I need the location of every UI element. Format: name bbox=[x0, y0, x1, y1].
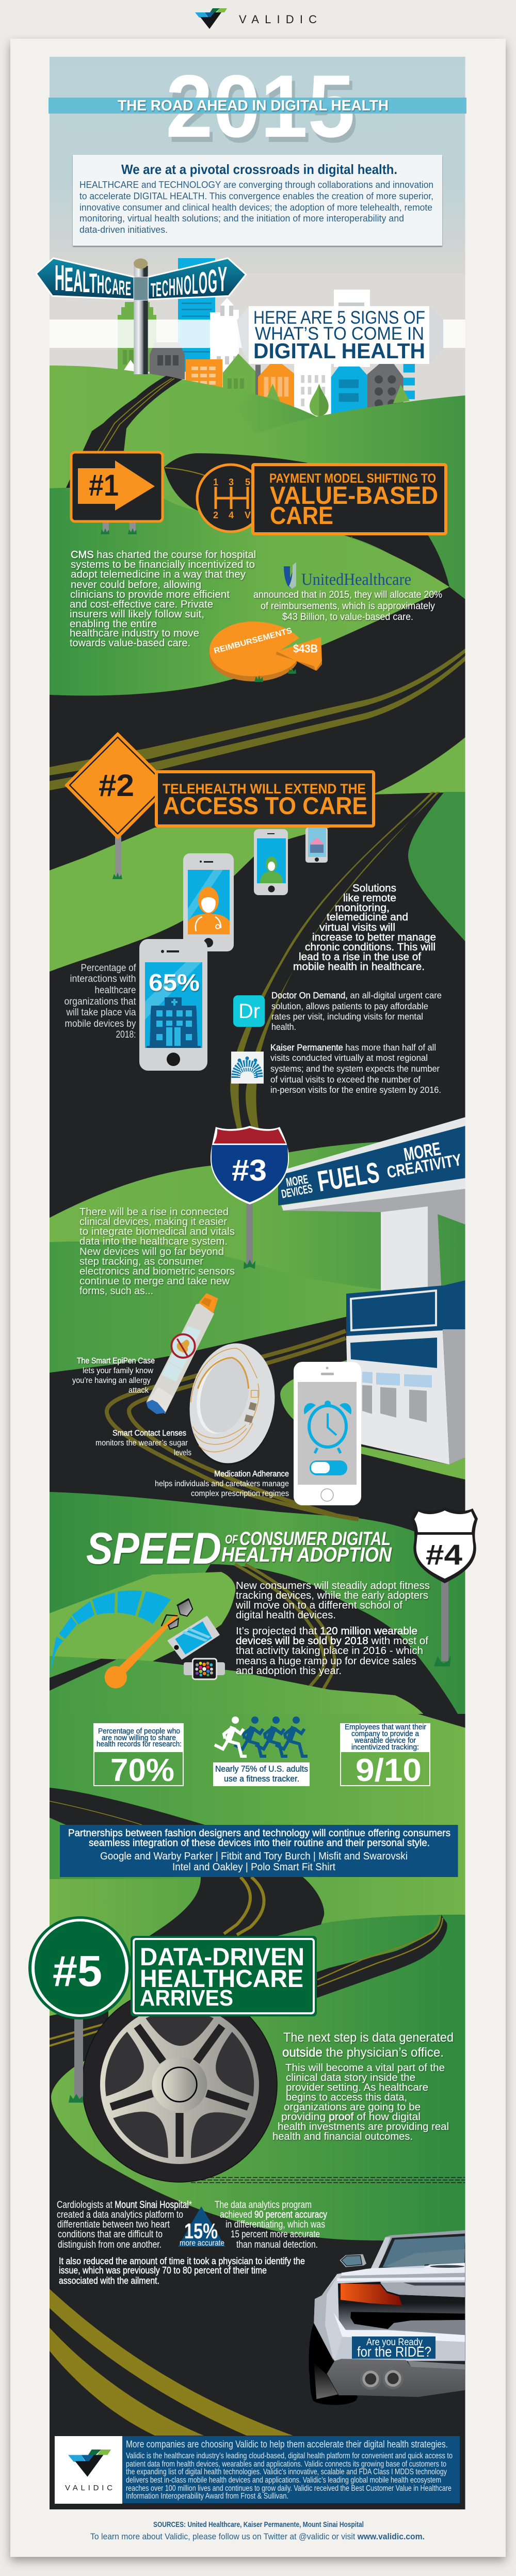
text: percentage of interactions: mobile devices by bbox=[65, 1019, 136, 1029]
stat box: 70%: health records for research: bbox=[96, 1740, 182, 1748]
speedometer hill bbox=[50, 1572, 235, 1661]
stat box: 70%: Percentage of people who bbox=[98, 1727, 180, 1736]
heading: speed of consumer digital health adoption: OF bbox=[225, 1533, 238, 1547]
text: next step: health and financial outcomes. bbox=[272, 2131, 413, 2142]
text: percentage of interactions: healthcare bbox=[95, 985, 136, 996]
text: solutions: increase to better manage bbox=[312, 932, 436, 943]
text: new consumers: will move on to a different school of bbox=[235, 1600, 402, 1611]
street sign: healthcare / technology: E bbox=[64, 260, 73, 298]
pie chart: reimbursements: REIMBURSEMENTS bbox=[213, 626, 293, 656]
overpass sign: more devices fuels more creativity: FUELS bbox=[315, 1156, 381, 1198]
street sign: healthcare / technology: T bbox=[89, 268, 97, 299]
heading: value-based care: PAYMENT MODEL SHIFTING TO bbox=[269, 471, 436, 486]
text: cardiologists right: The data analytics program bbox=[215, 2200, 312, 2211]
text: CMS bbox=[70, 549, 256, 649]
street sign: healthcare / technology: H bbox=[55, 258, 64, 298]
intro box: HEALTHCARE and TECHNOLOGY are converging through collaborations and innovation bbox=[79, 180, 433, 190]
section 4-5 green bbox=[50, 1714, 465, 1931]
text: connected clinical devices: There will be a rise in connected bbox=[79, 1206, 229, 1218]
text: connected clinical devices: forms, such as... bbox=[79, 1285, 153, 1297]
grass tuft bbox=[69, 2094, 84, 2103]
bottom road lines bbox=[50, 2289, 293, 2436]
stat box: 9/10: wearable device for bbox=[354, 1737, 416, 1745]
text: new consumers: It’s projected that 120 million wearable bbox=[236, 1626, 417, 1637]
wide road band bbox=[50, 587, 465, 1239]
street sign: healthcare / technology: H bbox=[97, 270, 104, 299]
sign #2 diamond: #2 bbox=[99, 768, 134, 803]
panel: road scene background bbox=[50, 57, 465, 2509]
car bbox=[309, 2230, 465, 2405]
text: contact lenses caption: monitors the wearer’s sugar bbox=[95, 1439, 188, 1448]
banner: here are 5 signs: DIGITAL HEALTH bbox=[253, 339, 425, 363]
text: new consumers: devices will be sold by 2018 with most of bbox=[236, 1635, 428, 1647]
intro box: innovative consumer and clinical health devices; the adoption of more telehealth, remote bbox=[79, 202, 432, 213]
translucent white band bbox=[50, 320, 465, 348]
pie chart: reimbursements bbox=[209, 622, 322, 682]
text: cardiologists left: Cardiologists at Mount Sinai Hospital* bbox=[57, 2200, 192, 2211]
text: new consumers: means a huge ramp up for device sales bbox=[236, 1656, 416, 1667]
text: Kaiser Permanente: systems; and the system expects the number bbox=[270, 1063, 440, 1074]
text: CMS: never could before, allowing bbox=[71, 579, 201, 591]
text: Kaiser Permanente: in-person visits for the entire system by 2016. bbox=[270, 1085, 441, 1095]
text: solutions bbox=[293, 883, 436, 973]
overpass sign: more devices fuels more creativity: DEVICES bbox=[280, 1182, 314, 1201]
text: connected clinical devices: continue to merge and take new bbox=[79, 1276, 230, 1287]
street sign: healthcare / technology: L bbox=[192, 268, 198, 300]
text: CMS: adopt telemedicine in a way that they bbox=[71, 569, 246, 580]
text: next step: clinical data story inside the bbox=[286, 2072, 415, 2084]
stat box: 70%: 70% bbox=[110, 1753, 174, 1788]
footer panel: about Validic: Validic is the healthcare industry’s leading cloud-based, digital health platform for convenient and quick access to bbox=[126, 2452, 453, 2460]
text: next step: The next step is data generated bbox=[283, 2030, 454, 2045]
sources bbox=[90, 2521, 425, 2541]
hill wedge below speedometer bbox=[50, 1656, 101, 1678]
road B bbox=[164, 453, 449, 594]
text: reduced time: associated with the ailment. bbox=[59, 2276, 159, 2286]
text: cardiologists right bbox=[215, 2200, 327, 2250]
street sign: healthcare / technology: O bbox=[199, 266, 207, 300]
gear shift icon: 5 bbox=[245, 477, 250, 487]
text: next step: provider setting. As healthcare bbox=[286, 2082, 428, 2093]
text: percentage of interactions bbox=[64, 963, 136, 1040]
text: CMS: healthcare industry to move bbox=[70, 628, 199, 639]
text: Doctor On Demand: solution, allows patients to pay affordable bbox=[271, 1001, 428, 1011]
footer panel: about Validic: delivers best in-class mobile health devices and applications. Validic’s leading global mobile health ecosystem bbox=[126, 2476, 441, 2485]
sign #5 circle bbox=[28, 1916, 132, 2020]
hill behind building bbox=[280, 1358, 356, 1445]
intro box bbox=[73, 155, 442, 246]
heading: speed of consumer digital health adoption: HEALTH ADOPTION bbox=[221, 1544, 392, 1566]
text: cardiologists right: than manual detection. bbox=[236, 2239, 318, 2250]
footer panel: about Validic: the expanding list of digital health technologies. Validic’s innovative, scalable and FDA Class I MDDS technology bbox=[126, 2468, 447, 2476]
sign #5 post bbox=[74, 2016, 83, 2099]
road above partnerships bbox=[50, 1788, 206, 1825]
gear shift icon: 1 bbox=[213, 477, 218, 487]
partnerships panel: Google and Warby Parker | Fitbit and Tory Burch | Misfit and Swarovski bbox=[100, 1851, 408, 1862]
UnitedHealthcare logo: UnitedHealthcare bbox=[301, 570, 411, 589]
text: connected clinical devices: New devices will go far beyond bbox=[79, 1246, 224, 1258]
sign #1 arrow bbox=[71, 452, 163, 534]
text: cardiologists right: 15 percent more accurate bbox=[231, 2229, 320, 2240]
sign #1 arrow: #1 bbox=[89, 469, 119, 502]
sign #5 circle: #5 bbox=[53, 1947, 102, 1995]
hills: upper bbox=[50, 365, 465, 697]
city skyline: front houses bbox=[255, 364, 415, 417]
heading: speed of consumer digital health adoption: CONSUMER DIGITAL bbox=[239, 1528, 391, 1549]
header logo: Validic bbox=[195, 8, 317, 29]
intro box: We are at a pivotal crossroads in digital health. bbox=[121, 162, 397, 177]
text: new consumers bbox=[235, 1580, 430, 1677]
gear shift icon: 2 bbox=[213, 510, 218, 520]
street sign: healthcare / technology: C bbox=[162, 276, 168, 301]
street sign: healthcare / technology: H bbox=[169, 274, 175, 300]
stat box: 75%: use a fitness tracker. bbox=[224, 1774, 299, 1784]
text: new consumers: and adoption this year. bbox=[236, 1665, 342, 1677]
text: medication adherance caption: Medication Adherance bbox=[214, 1470, 289, 1478]
license plate: are you ready: Are you Ready bbox=[366, 2337, 423, 2348]
text: EpiPen caption bbox=[72, 1357, 155, 1395]
stat box: 70% bbox=[93, 1723, 183, 1788]
banner: here are 5 signs: WHAT’S TO COME IN bbox=[255, 324, 424, 344]
hill under section 1 bbox=[50, 488, 449, 695]
text: EpiPen caption: you’re having an allergy bbox=[72, 1376, 151, 1385]
phone: large 65% bbox=[139, 939, 207, 1071]
phone: medium with doctor bbox=[183, 853, 234, 951]
road E bbox=[141, 1877, 324, 1941]
sign #3 interstate shield: #3 bbox=[232, 1154, 267, 1187]
footer panel: logo bbox=[55, 2436, 122, 2504]
text: next step: providing proof of how digital bbox=[281, 2111, 421, 2123]
text: United announcement: of reimbursements, which is approximately bbox=[261, 601, 435, 612]
heading: access to care: ACCESS TO CARE bbox=[163, 792, 367, 819]
text: cardiologists left bbox=[57, 2200, 192, 2250]
text: cardiologists right: in differentiating, which was bbox=[225, 2219, 325, 2230]
pie chart: reimbursements: $43B bbox=[293, 642, 318, 655]
text: solutions: Solutions bbox=[352, 883, 396, 894]
text: contact lenses caption bbox=[95, 1429, 191, 1457]
text: connected clinical devices: step tracking, as consumer bbox=[79, 1256, 203, 1267]
footer panel: about Validic: Information Interoperability Award from Frost & Sullivan. bbox=[126, 2492, 288, 2501]
text: CMS: enabling the entire bbox=[70, 618, 157, 630]
text: next step: outside the physician’s office. bbox=[282, 2045, 444, 2060]
city skyline: back buildings bbox=[118, 258, 370, 397]
text: percentage of interactions: Percentage of bbox=[80, 963, 136, 974]
text: Kaiser Permanente bbox=[270, 1042, 441, 1095]
stat box: 9/10: 9/10 bbox=[356, 1753, 422, 1788]
text: EpiPen caption: attack bbox=[128, 1386, 149, 1395]
text: Kaiser Permanente: visits conducted virtually at most regional bbox=[270, 1053, 428, 1063]
text: solutions: virtual visits will bbox=[319, 922, 395, 933]
street sign: healthcare / technology: A bbox=[73, 263, 83, 299]
partnerships panel: Partnerships between fashion designers and technology will continue offering consumers bbox=[68, 1827, 450, 1839]
text: CMS: clinicians to provide more efficient bbox=[70, 589, 230, 600]
street sign: healthcare / technology bbox=[36, 258, 246, 374]
text: Doctor On Demand: health. bbox=[271, 1022, 296, 1032]
overpass sign: more devices fuels more creativity: MORE bbox=[402, 1138, 442, 1165]
text: United announcement: announced that in 2015, they will allocate 20% bbox=[253, 590, 442, 600]
license plate: are you ready bbox=[352, 2336, 436, 2360]
icon: Kaiser Permanente bbox=[231, 1052, 264, 1084]
gear shift icon: 3 bbox=[229, 477, 234, 487]
license plate: are you ready: for the RIDE? bbox=[357, 2344, 431, 2360]
banner: here are 5 signs: HERE ARE 5 SIGNS OF bbox=[253, 308, 425, 328]
road C bbox=[50, 1291, 465, 1533]
UnitedHealthcare logo bbox=[284, 562, 411, 589]
road F bbox=[310, 1915, 447, 2000]
sign #4 route shield bbox=[411, 1507, 478, 1666]
partnerships panel: Intel and Oakley | Polo Smart Fit Shirt bbox=[172, 1862, 335, 1873]
text: Doctor On Demand: rates per visit, including visits for mental bbox=[271, 1011, 423, 1022]
runners icon bbox=[215, 1716, 308, 1756]
intro box: data-driven initiatives. bbox=[79, 225, 168, 235]
street sign: healthcare / technology: G bbox=[208, 263, 217, 299]
heading: data-driven healthcare arrives: HEALTHCARE bbox=[140, 1965, 303, 1993]
overpass sign: more devices fuels more creativity bbox=[278, 1117, 465, 1296]
text: solutions: chronic conditions. This will bbox=[305, 942, 436, 953]
text: connected clinical devices bbox=[79, 1206, 235, 1297]
road lines: band bbox=[50, 648, 465, 790]
header logo: Validic: VALIDIC bbox=[239, 13, 317, 26]
street sign: healthcare / technology: C bbox=[105, 272, 111, 299]
footer panel: about Validic: More companies are choosing Validic to help them accelerate their digital health strategies. bbox=[126, 2439, 448, 2450]
text: Kaiser Permanente: Kaiser Permanente has more than half of all bbox=[270, 1042, 436, 1053]
street sign: healthcare / technology: Y bbox=[218, 260, 227, 299]
triangle: 15% more accurate: more accurate bbox=[180, 2239, 224, 2248]
heading: access to care bbox=[156, 772, 374, 826]
overpass sign: more devices fuels more creativity: CREATIVITY bbox=[385, 1150, 463, 1182]
text: next step: begins to access this data, bbox=[286, 2092, 407, 2103]
road lines: to #3 shield bbox=[230, 792, 440, 1131]
building bbox=[346, 1280, 465, 1465]
road: bottom curve bbox=[50, 2003, 465, 2509]
text: new consumers: that activity taking place in 2016 - which bbox=[236, 1645, 423, 1657]
text: EpiPen caption: lets your family know bbox=[83, 1366, 153, 1375]
sources: SOURCES: United Healthcare, Kaiser Permanente, Mount Sinai Hospital bbox=[153, 2521, 364, 2529]
stat box: 70%: are now willing to share bbox=[102, 1734, 176, 1742]
footer panel: about Validic bbox=[122, 2436, 460, 2503]
text: percentage of interactions: will take place via bbox=[66, 1007, 136, 1018]
text: connected clinical devices: electronics and biometric sensors bbox=[79, 1266, 235, 1277]
text: cardiologists left: conditions that are difficult to bbox=[58, 2229, 163, 2240]
triangle: 15% more accurate bbox=[178, 2206, 225, 2248]
overpass sign: more devices fuels more creativity: MORE bbox=[285, 1172, 309, 1190]
text: United announcement bbox=[253, 590, 442, 623]
text: United announcement: $43 Billion, to value-based care. bbox=[282, 612, 413, 623]
text: solutions: monitoring, bbox=[335, 902, 390, 914]
text: new consumers: digital health devices. bbox=[236, 1610, 336, 1621]
text: next step bbox=[272, 2030, 454, 2142]
sign #2 diamond bbox=[66, 733, 170, 879]
stat box: 9/10 bbox=[340, 1723, 430, 1788]
text: next step: organizations are going to be bbox=[284, 2102, 421, 2113]
text: connected clinical devices: data into the healthcare system. bbox=[79, 1236, 228, 1247]
tire bbox=[82, 1987, 277, 2182]
text: cardiologists left: distinguish from one another. bbox=[58, 2239, 162, 2250]
text: contact lenses caption: Smart Contact Lenses bbox=[112, 1429, 186, 1438]
road lines left of tire bbox=[50, 2024, 106, 2046]
gear shift icon bbox=[197, 465, 264, 532]
text: CMS: CMS has charted the course for hospital bbox=[71, 549, 256, 561]
sign #4 route shield: #4 bbox=[426, 1538, 462, 1571]
heading: value-based care: VALUE-BASED bbox=[270, 482, 438, 510]
text: percentage of interactions: organizations that bbox=[64, 996, 136, 1007]
tire tracks bbox=[191, 2177, 465, 2183]
text: Doctor On Demand bbox=[271, 990, 442, 1032]
text: Kaiser Permanente: of virtual visits to exceed the number of bbox=[270, 1074, 421, 1085]
text: connected clinical devices: clinical devices, making it easier bbox=[79, 1216, 227, 1228]
text: next step: This will become a vital part of the bbox=[285, 2062, 445, 2074]
phone: medication alarm bbox=[294, 1362, 361, 1505]
icon: EpiPen bbox=[146, 1293, 218, 1414]
text: medication adherance caption: helps individuals and caretakers manage bbox=[155, 1480, 289, 1488]
text: percentage of interactions: 2018: bbox=[116, 1029, 136, 1040]
text: medication adherance caption bbox=[155, 1470, 289, 1498]
text: CMS: insurers will likely follow suit, bbox=[70, 609, 204, 620]
partnerships panel bbox=[60, 1825, 458, 1877]
street sign: healthcare / technology: N bbox=[176, 273, 183, 300]
text: solutions: mobile health in healthcare. bbox=[293, 961, 425, 973]
lower green hill bbox=[50, 1487, 465, 1719]
stat box: 9/10: incentivized tracking: bbox=[351, 1743, 419, 1752]
gear shift icon: V bbox=[245, 510, 251, 520]
text: cardiologists right: achieved 90 percent accuracy bbox=[220, 2209, 327, 2220]
footer panel: about Validic: patient data from health devices, wearables and applications. Validic connects its growing base of customers to bbox=[126, 2460, 446, 2469]
stat box: 9/10: company to provide a bbox=[351, 1730, 420, 1738]
street sign: healthcare / technology: E bbox=[125, 278, 131, 300]
heading: speed of consumer digital health adoption: SPEED bbox=[86, 1524, 221, 1573]
text: new consumers: New consumers will steadily adopt fitness bbox=[236, 1580, 430, 1592]
street sign: healthcare / technology: L bbox=[83, 265, 90, 299]
stat box: 75%: Nearly 75% of U.S. adults bbox=[215, 1764, 308, 1774]
text: percentage of interactions: interactions with bbox=[70, 974, 136, 984]
street sign: healthcare / technology: A bbox=[112, 275, 119, 299]
text: CMS: systems to be financially incentivized to bbox=[71, 559, 255, 570]
intro box: monitoring, virtual health solutions; and the initiation of more interoperability and bbox=[79, 213, 404, 224]
text: reduced time bbox=[59, 2256, 305, 2286]
stat box: 75% bbox=[213, 1762, 310, 1786]
heading: access to care: TELEHEALTH WILL EXTEND THE bbox=[163, 781, 366, 797]
text: next step: health investments are providing real bbox=[278, 2121, 449, 2133]
banner: here are 5 signs bbox=[237, 306, 443, 364]
heading: speed of consumer digital health adoption bbox=[86, 1524, 392, 1573]
title ribbon bbox=[49, 98, 466, 114]
hill corners bbox=[372, 737, 465, 794]
text: solutions: telemedicine and bbox=[327, 912, 408, 923]
title ribbon: THE ROAD AHEAD IN DIGITAL HEALTH bbox=[118, 98, 389, 114]
sources: To learn more about Validic, please follow us on Twitter at @validic or visit www.validic.com. bbox=[90, 2532, 425, 2541]
text: reduced time: It also reduced the amount of time it took a physician to identify the bbox=[59, 2256, 305, 2266]
main title: 2015: 2015 bbox=[166, 57, 355, 156]
heading: value-based care bbox=[253, 465, 446, 534]
text: medication adherance caption: complex prescription regimes bbox=[191, 1489, 289, 1498]
text: new consumers: tracking devices, while the early adopters bbox=[236, 1590, 428, 1601]
text: connected clinical devices: to integrate biomedical and vitals bbox=[79, 1226, 235, 1237]
icon: smart contact lens bbox=[182, 1338, 282, 1471]
heading: data-driven healthcare arrives: ARRIVES bbox=[140, 1985, 233, 2011]
text: cardiologists left: created a data analytics platform to bbox=[57, 2209, 183, 2220]
text: CMS: towards value-based care. bbox=[70, 638, 190, 649]
stat box: 9/10: Employees that want their bbox=[345, 1723, 426, 1731]
text: cardiologists left: differentiate between two heart bbox=[57, 2219, 170, 2230]
phone: tiny with bank bbox=[305, 828, 328, 863]
text: solutions: lead to a rise in the use of bbox=[299, 951, 421, 963]
hill below #3 bbox=[50, 1136, 465, 1497]
icon: Doctor On Demand: Dr bbox=[238, 1000, 260, 1023]
street sign: healthcare / technology: R bbox=[119, 277, 125, 299]
street sign: healthcare / technology: E bbox=[156, 278, 162, 301]
icon: Doctor On Demand bbox=[233, 995, 265, 1027]
heading: data-driven healthcare arrives bbox=[131, 1936, 317, 2016]
main title: 2015: 2015 bbox=[169, 62, 358, 161]
text: reduced time: issue, which was previously 70 to 80 percent of their time bbox=[59, 2265, 267, 2276]
street sign: healthcare / technology: T bbox=[151, 280, 156, 301]
lower hill bbox=[50, 1879, 465, 2271]
road D bbox=[50, 1564, 458, 1719]
footer panel: logo: VALIDIC bbox=[65, 2484, 112, 2492]
road A bbox=[66, 376, 182, 488]
hill below road D bbox=[50, 1659, 428, 1719]
text: solutions: like remote bbox=[343, 893, 396, 904]
speedometer with wearables bbox=[51, 1591, 225, 1689]
triangle: 15% more accurate: 15% bbox=[184, 2219, 218, 2243]
heading: value-based care: CARE bbox=[270, 502, 333, 530]
phone: large 65%: 65% bbox=[149, 969, 200, 996]
partnerships panel: seamless integration of these devices into their routine and their personal style. bbox=[89, 1837, 430, 1849]
heading: data-driven healthcare arrives: DATA-DRIVEN bbox=[140, 1944, 304, 1971]
intro box: to accelerate DIGITAL HEALTH. This convergence enables the creation of more superior, bbox=[79, 191, 433, 201]
text: EpiPen caption: The Smart EpiPen Case bbox=[77, 1357, 155, 1365]
sign #3 interstate shield bbox=[211, 1126, 289, 1269]
text: Doctor On Demand: Doctor On Demand, an all-digital urgent care bbox=[271, 990, 442, 1000]
street sign: healthcare / technology: O bbox=[184, 271, 191, 300]
road lines C bbox=[107, 1331, 359, 1519]
text: CMS: and cost-effective care. Private bbox=[70, 599, 213, 610]
phone: small with agent bbox=[254, 829, 288, 895]
text: contact lenses caption: levels bbox=[174, 1449, 191, 1457]
gear shift icon: 4 bbox=[229, 510, 234, 520]
